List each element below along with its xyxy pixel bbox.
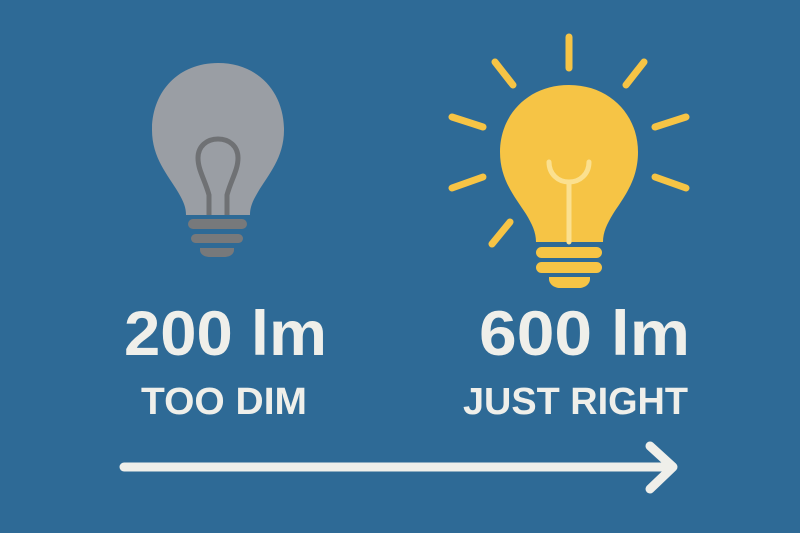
label: 600 lm: 600 lm — [479, 299, 690, 369]
label: TOO DIM: TOO DIM — [141, 381, 307, 423]
icon: bright yellow bulb with rays — [452, 37, 686, 288]
arrow — [124, 446, 673, 489]
label: 200 lm: 200 lm — [124, 299, 327, 369]
label: JUST RIGHT: JUST RIGHT — [463, 381, 688, 423]
icon: dim gray bulb — [152, 63, 284, 257]
